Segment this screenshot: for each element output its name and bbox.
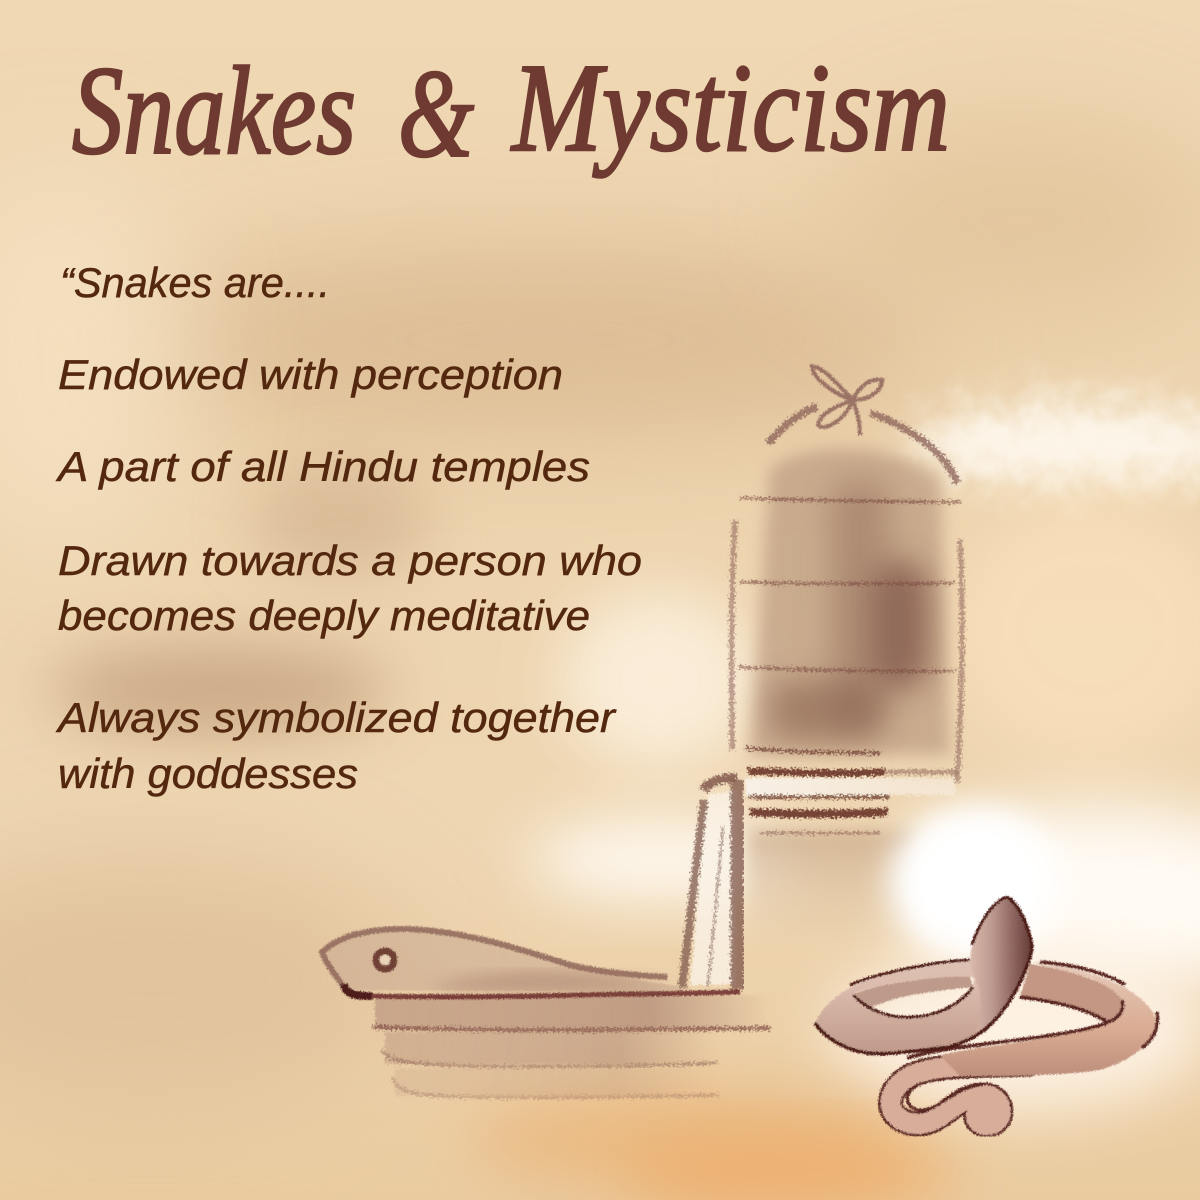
line: goddesses: with goddesses bbox=[58, 750, 358, 797]
ring right band bbox=[940, 962, 1157, 1076]
line: perception: Endowed with perception bbox=[58, 351, 563, 398]
tail curl bbox=[891, 1064, 1030, 1125]
line: drawn towards: Drawn towards a person who bbox=[58, 537, 642, 584]
ring outlines bbox=[815, 897, 1032, 1054]
knot on top bbox=[812, 366, 882, 435]
lower column bbox=[748, 830, 918, 950]
illustration: snake ring bbox=[815, 897, 1158, 1125]
water stream bbox=[682, 778, 738, 990]
illustration: shiva lingam bbox=[322, 366, 1060, 1097]
title: & bbox=[398, 45, 474, 184]
title bbox=[72, 39, 950, 184]
line: temples: A part of all Hindu temples bbox=[55, 443, 590, 490]
title: Snakes bbox=[72, 42, 356, 181]
lingam brush outline bbox=[732, 407, 962, 783]
title: Mysticism bbox=[510, 39, 950, 178]
mist over lower column bbox=[890, 805, 1060, 955]
lingam shading bbox=[750, 449, 950, 755]
base slab bbox=[373, 995, 770, 1097]
line: meditative: becomes deeply meditative bbox=[58, 592, 590, 639]
text block: snake attributes bbox=[55, 259, 642, 797]
neck, head and left loop bbox=[815, 897, 1032, 1054]
line: intro: “Snakes are.... bbox=[60, 259, 330, 306]
ring inner wall bbox=[1020, 964, 1123, 1023]
line: symbolized: Always symbolized together bbox=[55, 694, 617, 741]
collar bands bbox=[745, 771, 958, 833]
ring dark edges bbox=[907, 962, 1158, 1058]
spout snake head bbox=[322, 929, 740, 997]
